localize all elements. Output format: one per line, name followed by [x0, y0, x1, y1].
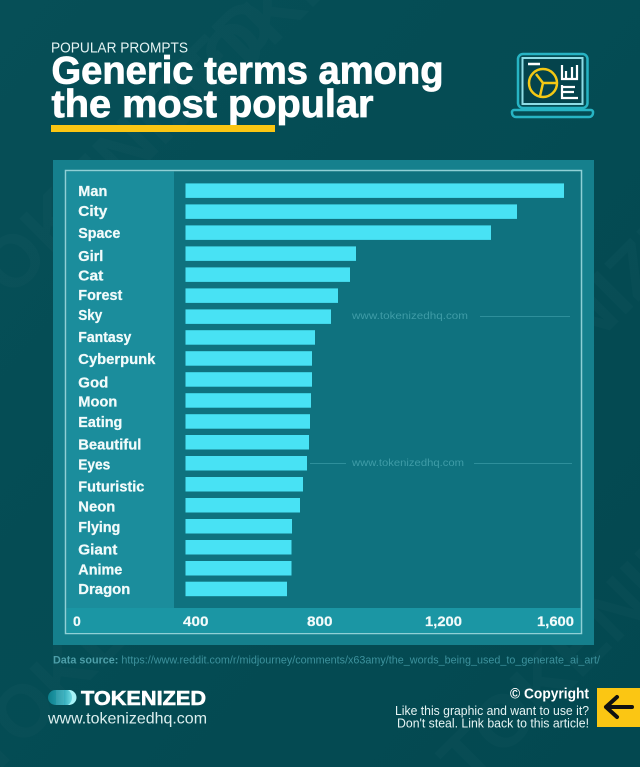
logo: tokenized: TOKENIZED	[81, 687, 206, 710]
category labels: City	[78, 204, 107, 220]
watermark: site url: www.tokenizedhq.com	[351, 457, 464, 469]
axis strip background	[66, 608, 580, 633]
logo: tokenized: www.tokenizedhq.com	[47, 710, 207, 728]
category labels: Eating	[78, 415, 122, 431]
title: Generic terms among	[52, 50, 444, 92]
copyright note: © Copyright	[510, 686, 589, 702]
category labels: Girl	[78, 249, 103, 265]
watermark: site url	[310, 310, 572, 469]
title: the most popular	[52, 83, 374, 126]
copyright note: Don't steal. Link back to this article!	[397, 716, 589, 730]
panel: bar chart	[53, 160, 594, 645]
title	[52, 50, 444, 126]
eyebrow: popular prompts: POPULAR PROMPTS	[51, 40, 188, 56]
title underline	[51, 125, 275, 132]
copyright note: Like this graphic and want to use it?	[395, 703, 589, 718]
category labels: Sky	[78, 308, 102, 324]
label column background	[66, 172, 174, 608]
axis labels: 0	[73, 613, 81, 629]
axis labels: 400	[183, 613, 209, 629]
axis labels: 1,600	[537, 613, 574, 629]
category labels: Cyberpunk	[78, 352, 156, 368]
category labels: Beautiful	[78, 438, 141, 454]
category labels: Cat	[78, 268, 103, 284]
logo: tokenized	[47, 687, 207, 728]
category labels: God	[78, 375, 108, 391]
category labels: Futuristic	[78, 480, 144, 496]
category labels: Moon	[78, 395, 117, 411]
category labels: Forest	[78, 288, 122, 304]
axis labels	[73, 613, 574, 629]
category labels: Flying	[78, 520, 120, 536]
arrow button	[597, 688, 640, 727]
category labels: Space	[78, 226, 120, 242]
data source: Data source: https://www.reddit.com/r/midjourney/comments/x63amy/the_words_being_used_to_generate_ai_art/	[53, 654, 601, 666]
logo mark	[48, 690, 77, 705]
category labels: Fantasy	[78, 330, 131, 346]
axis labels: 800	[307, 613, 333, 629]
category labels: Man	[78, 184, 107, 200]
category labels: Eyes	[78, 457, 110, 473]
copyright note	[395, 686, 589, 730]
category labels: Neon	[78, 500, 115, 516]
category labels	[78, 184, 156, 598]
icon: laptop with charts	[512, 54, 593, 117]
bars	[186, 183, 564, 596]
category labels: Anime	[78, 562, 122, 578]
watermark: site url: www.tokenizedhq.com	[351, 310, 468, 322]
category labels: Dragon	[78, 582, 130, 598]
category labels: Giant	[78, 542, 117, 558]
axis labels: 1,200	[425, 613, 462, 629]
